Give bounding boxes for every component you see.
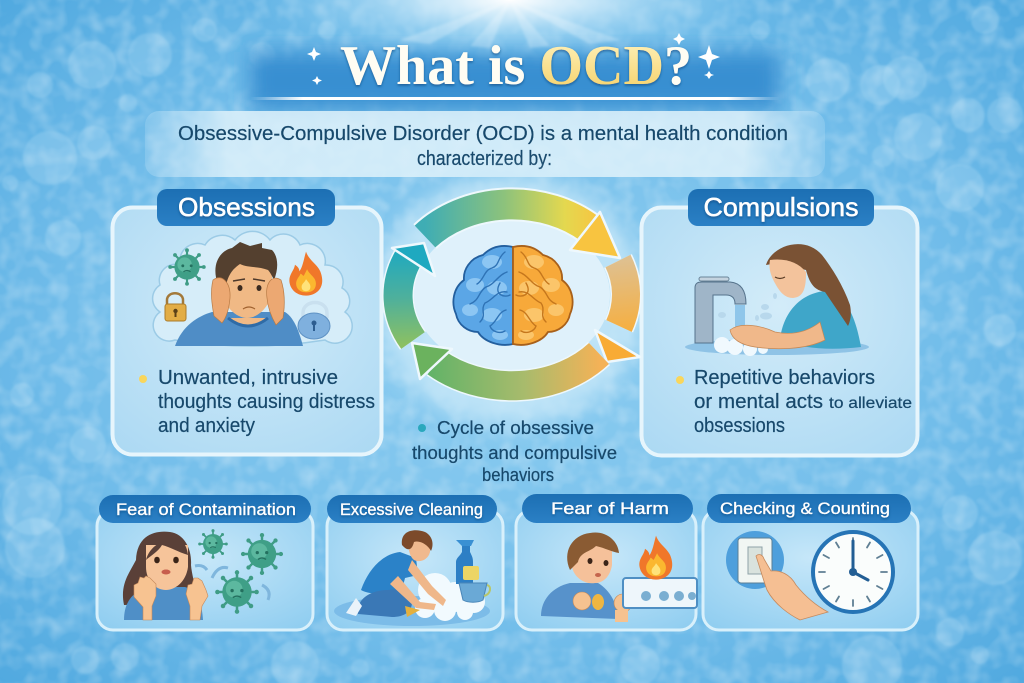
illustration: man scrubbing foam [334,530,490,626]
obsessions heading [157,189,335,226]
card: excessive cleaning [327,495,503,630]
cycle inner glow [414,219,610,371]
compulsions description small words: to alleviate [829,395,912,412]
illustration: frightened woman [123,532,208,620]
card: fear of contamination [97,495,313,630]
label pill: Checking & Counting [720,499,890,518]
card: checking and counting [703,494,918,630]
cycle description line 3: behaviors [482,465,554,485]
obsessions description line 3: and anxiety [158,415,255,437]
label pill: Fear of Harm [551,499,669,518]
compulsions description line 2: or mental acts [694,391,823,413]
label pill [327,495,497,523]
compulsions heading: Compulsions [704,192,858,222]
card: fear of harm [516,494,697,630]
cycle description line 1: Cycle of obsessive [437,418,594,438]
icon: blue padlock [298,302,330,339]
bullet [139,375,147,383]
icon: green virus [168,248,206,286]
label pill [99,495,311,523]
icon: stove with flame [623,536,697,608]
compulsions description line 3: obsessions [694,415,785,437]
icon: light switch [726,531,784,589]
panel: compulsions [642,189,918,456]
compulsions heading [688,189,874,226]
arrow: left [392,243,435,340]
label pill: Excessive Cleaning [340,500,483,519]
icon: brain [453,246,573,345]
panel: obsessions [97,189,918,630]
compulsions description line 1: Repetitive behaviors [694,367,875,389]
panel: intro definition [145,111,825,177]
top sunburst glow [250,0,770,58]
obsessions description line 2: thoughts causing distress [158,391,375,413]
icon: gold padlock [165,293,186,321]
label pill [707,494,911,523]
title underline [250,97,780,100]
title: What is OCD? [340,35,692,97]
illustration: woman washing hands [685,244,869,356]
label pill [522,494,693,523]
intro text line 1: Obsessive-Compulsive Disorder (OCD) is a mental health condition [178,123,788,145]
arrow: top [425,204,620,258]
title sparkles [307,33,720,85]
illustration: worried man in thought cloud [139,231,375,437]
illustration: worried boy [541,532,632,622]
icon: flame [289,252,322,296]
cycle description line 2: thoughts and compulsive [412,443,617,463]
man figure [175,242,303,346]
icon: pointing hand [756,555,828,620]
icon: virus cluster [195,529,283,614]
obsessions description line 1: Unwanted, intrusive [158,367,338,389]
arrow: right [595,261,640,362]
icon: spray bottle and bucket [456,540,490,602]
icon: clock [813,532,893,612]
title band [250,52,780,110]
arrow: bottom [412,343,599,386]
panel: centre backdrop [375,175,645,425]
label pill: Fear of Contamination [116,500,296,519]
intro text line 2: characterized by: [417,148,552,170]
cycle bullet [418,424,426,432]
cycle arrows [392,204,640,386]
bullet [676,376,684,384]
obsessions heading: Obsessions [178,192,315,222]
